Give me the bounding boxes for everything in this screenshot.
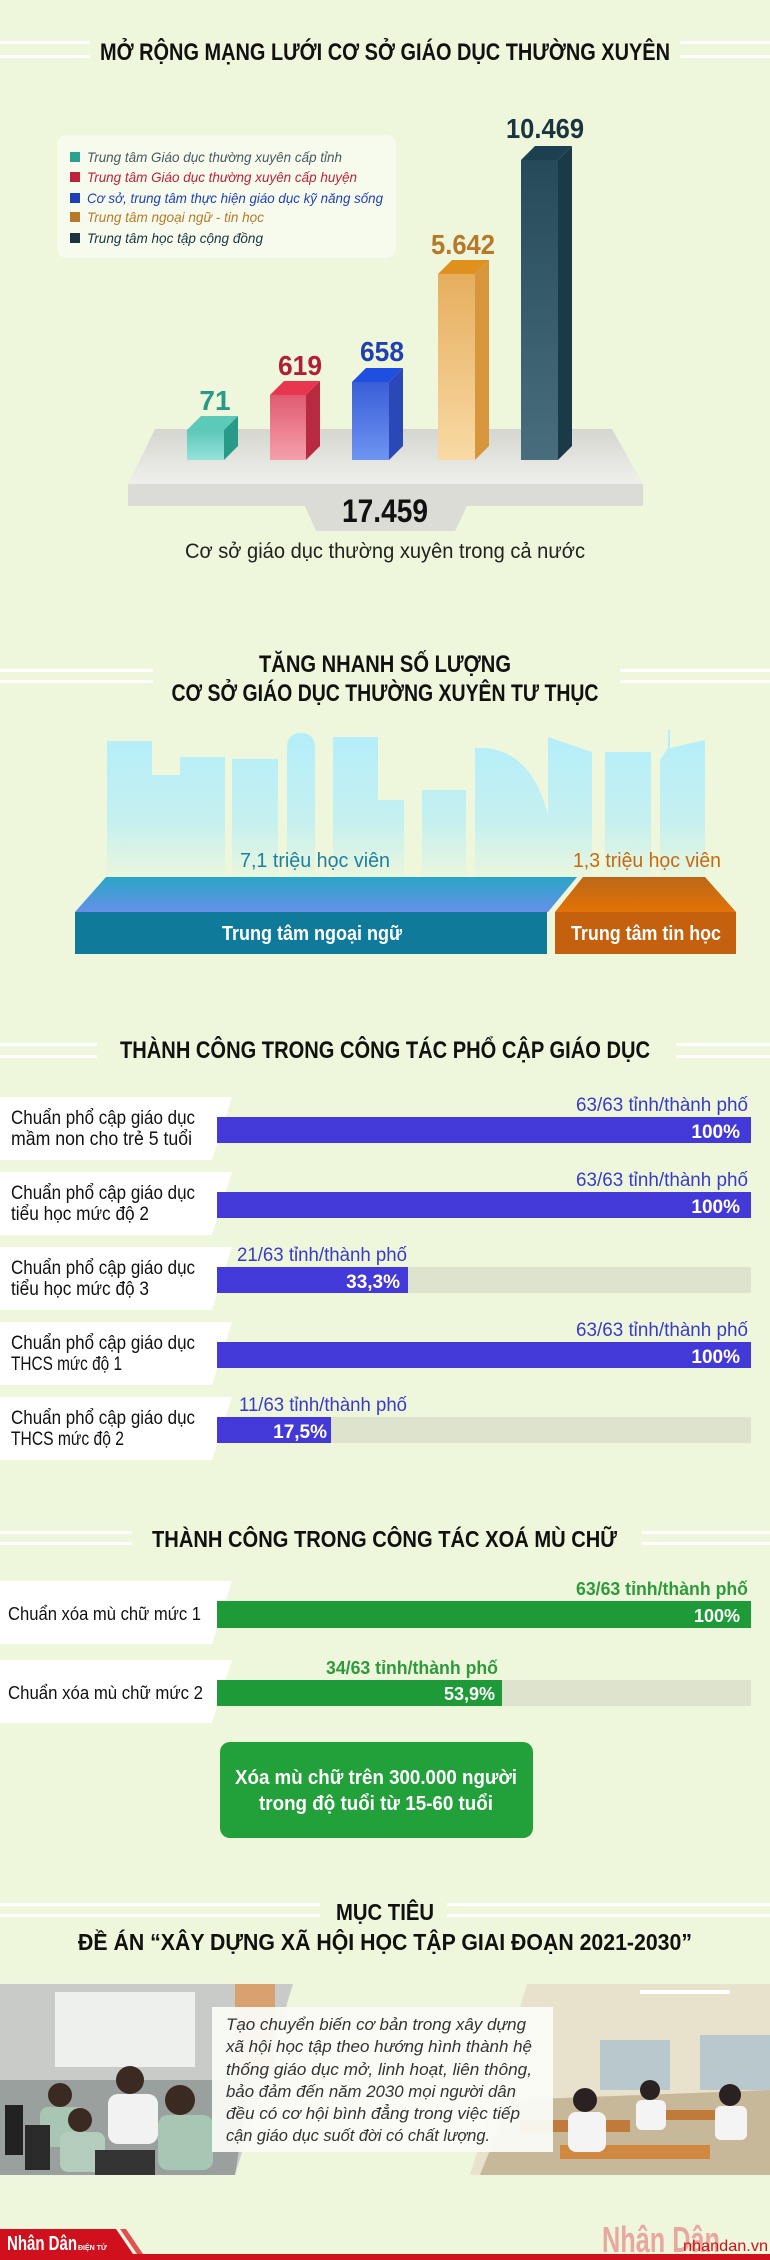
legend: Trung tâm ngoại ngữ - tin học	[87, 209, 264, 225]
row: tiểu học 2	[0, 1170, 751, 1235]
row: THCS 1: THCS mức độ 1	[11, 1354, 122, 1375]
platform	[128, 429, 643, 531]
bar: 71: 71	[199, 385, 231, 416]
row: mức 1: Chuẩn xóa mù chữ mức 1	[8, 1604, 201, 1624]
row: mức 2: 53,9%	[444, 1684, 495, 1704]
footer: nhandan.vn	[683, 2238, 768, 2255]
row: tiểu học 3: 33,3%	[346, 1272, 400, 1293]
row: mức 1: 100%	[694, 1606, 740, 1626]
bar: 71	[187, 385, 238, 460]
stacked bar: learners: Trung tâm tin học	[571, 923, 721, 945]
row: mầm non: 100%	[691, 1122, 740, 1143]
row: THCS 2: 11/63 tỉnh/thành phố	[239, 1395, 407, 1416]
row: mức 1	[0, 1579, 751, 1644]
text box: objective: Tạo chuyển biến cơ bản trong xây dựng	[226, 2015, 527, 2034]
skyline illustration	[107, 730, 705, 880]
bar: 658: 658	[360, 336, 404, 367]
legend: Trung tâm Giáo dục thường xuyên cấp tỉnh	[87, 149, 342, 165]
text box: objective: đều có cơ hội bình đẳng trong việc tiếp	[226, 2104, 520, 2123]
bar: 658	[352, 336, 404, 460]
row: THCS 2: 17,5%	[273, 1422, 327, 1443]
title: section 2: CƠ SỞ GIÁO DỤC THƯỜNG XUYÊN TƯ THỤC	[172, 678, 598, 707]
row: THCS 2: Chuẩn phổ cập giáo dục	[11, 1408, 195, 1429]
row: mầm non: 63/63 tỉnh/thành phố	[576, 1095, 748, 1116]
title: section 5: MỤC TIÊU	[336, 1898, 434, 1925]
legend	[57, 135, 396, 258]
footer: Nhân Dân	[602, 2219, 720, 2260]
row: THCS 1: 100%	[691, 1347, 740, 1368]
bar: 10.469	[506, 113, 584, 460]
row: THCS 1: 63/63 tỉnh/thành phố	[576, 1320, 748, 1341]
footer	[0, 2219, 770, 2260]
title: section 4	[0, 1525, 770, 1552]
photo: computer class	[0, 1984, 293, 2175]
title: section 4: THÀNH CÔNG TRONG CÔNG TÁC XOÁ MÙ CHỮ	[152, 1525, 618, 1552]
bar: 619: 619	[278, 350, 322, 381]
bar: 10.469: 10.469	[506, 113, 584, 144]
legend: Cơ sở, trung tâm thực hiện giáo dục kỹ năng sống	[87, 190, 383, 206]
bar: 619	[270, 350, 322, 460]
row: mức 2: Chuẩn xóa mù chữ mức 2	[8, 1683, 203, 1703]
row: mức 2: 34/63 tỉnh/thành phố	[326, 1658, 498, 1678]
row: tiểu học 3: tiểu học mức độ 3	[11, 1279, 149, 1300]
row: tiểu học 2: 100%	[691, 1197, 740, 1218]
row: mầm non: mầm non cho trẻ 5 tuổi	[11, 1129, 192, 1150]
row: tiểu học 2: tiểu học mức độ 2	[11, 1204, 149, 1225]
title: section 5	[0, 1898, 770, 1955]
bar chart	[187, 113, 584, 460]
title: section 1: MỞ RỘNG MẠNG LƯỚI CƠ SỞ GIÁO DỤC THƯỜNG XUYÊN	[100, 37, 670, 66]
footer: ĐIỆN TỬ	[78, 2243, 107, 2252]
bar: 5.642	[431, 229, 495, 460]
row: THCS 1	[0, 1320, 751, 1385]
row: THCS 1: Chuẩn phổ cập giáo dục	[11, 1333, 195, 1354]
stacked bar: learners: Trung tâm ngoại ngữ	[222, 923, 402, 945]
title: section 2	[0, 650, 770, 707]
total caption: Cơ sở giáo dục thường xuyên trong cả nước	[185, 540, 585, 563]
row: tiểu học 2: 63/63 tỉnh/thành phố	[576, 1170, 748, 1191]
universalization bars	[0, 1095, 751, 1460]
callout: literacy	[220, 1742, 533, 1838]
row: THCS 2	[0, 1395, 751, 1460]
callout: literacy: Xóa mù chữ trên 300.000 người	[235, 1767, 517, 1789]
title: section 2: TĂNG NHANH SỐ LƯỢNG	[259, 650, 511, 678]
text box: objective	[212, 2007, 553, 2152]
row: mức 2	[0, 1658, 751, 1723]
title: section 5: ĐỀ ÁN “XÂY DỰNG XÃ HỘI HỌC TẬP GIAI ĐOẠN 2021-2030”	[78, 1928, 692, 1955]
row: mầm non	[0, 1095, 751, 1160]
row: tiểu học 3	[0, 1245, 751, 1310]
stacked bar: learners	[75, 850, 736, 954]
title: section 3: THÀNH CÔNG TRONG CÔNG TÁC PHỔ CẬP GIÁO DỤC	[120, 1036, 650, 1064]
literacy bars	[0, 1579, 751, 1723]
total number: 17.459	[342, 493, 428, 529]
text box: objective: xã hội học tập theo hướng hình thành hệ	[225, 2037, 532, 2056]
text box: objective: thống giáo dục mở, linh hoạt, liên thông,	[226, 2060, 532, 2079]
text box: objective: bảo đảm đến năm 2030 mọi người dân	[226, 2082, 516, 2101]
label: 1,3 triệu: 1,3 triệu học viên	[573, 850, 721, 872]
legend: Trung tâm học tập cộng đồng	[87, 230, 263, 246]
row: THCS 2: THCS mức độ 2	[11, 1429, 124, 1450]
photo: exam room	[470, 1984, 770, 2175]
footer: Nhân Dân	[7, 2233, 77, 2255]
text box: objective: cận giáo dục suốt đời có chất lượng.	[226, 2126, 490, 2145]
label: 7,1 triệu: 7,1 triệu học viên	[240, 850, 390, 872]
row: tiểu học 2: Chuẩn phổ cập giáo dục	[11, 1183, 195, 1204]
bar: 5.642: 5.642	[431, 229, 495, 260]
row: tiểu học 3: Chuẩn phổ cập giáo dục	[11, 1258, 195, 1279]
row: mức 1: 63/63 tỉnh/thành phố	[576, 1579, 748, 1599]
legend: Trung tâm Giáo dục thường xuyên cấp huyện	[87, 169, 357, 185]
row: mầm non: Chuẩn phổ cập giáo dục	[11, 1108, 195, 1129]
callout: literacy: trong độ tuổi từ 15-60 tuổi	[259, 1793, 493, 1815]
row: tiểu học 3: 21/63 tỉnh/thành phố	[237, 1245, 407, 1266]
